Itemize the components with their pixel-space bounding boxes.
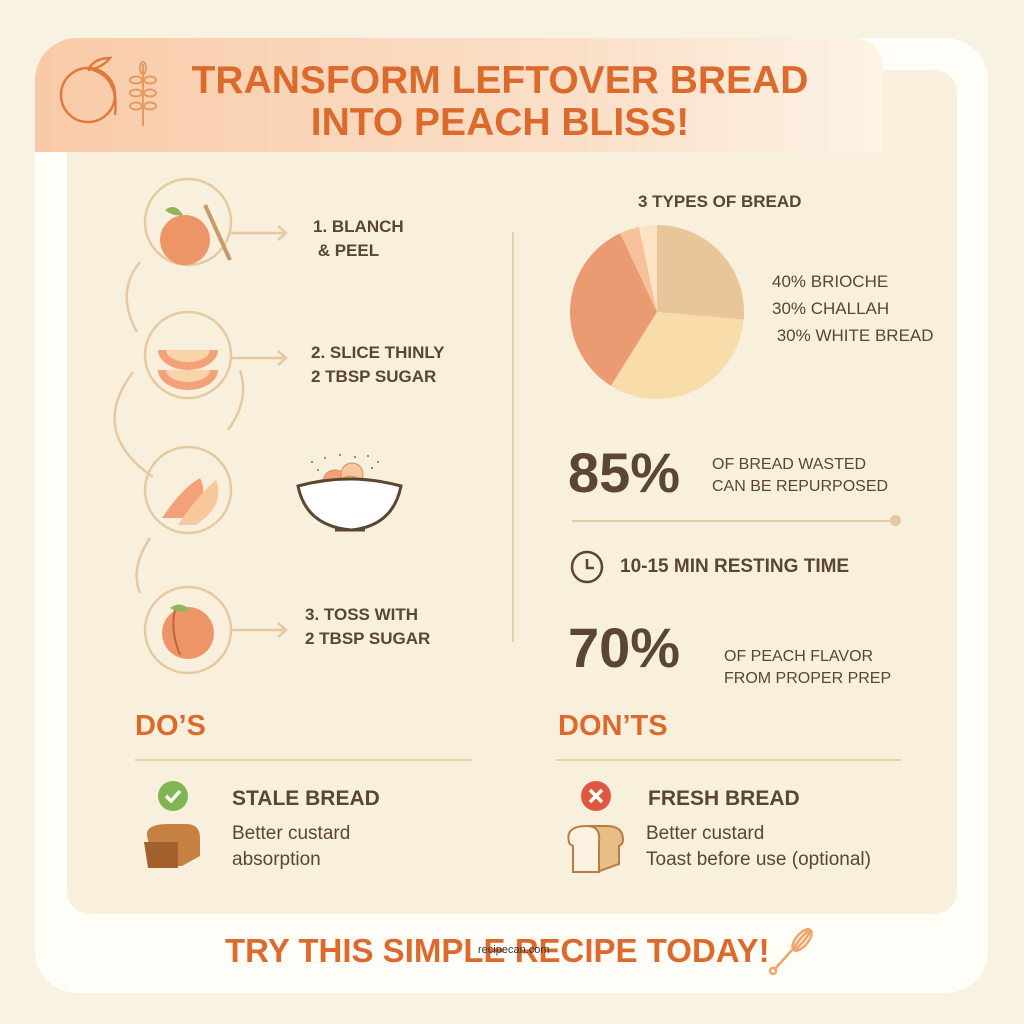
text: 2. SLICE THINLY — [311, 343, 445, 362]
icon: clock + resting time — [570, 550, 849, 584]
header band — [35, 38, 883, 152]
text: FROM PROPER PREP — [724, 670, 891, 687]
text: OF PEACH FLAVOR — [724, 648, 873, 665]
don'ts item — [567, 781, 871, 874]
pie chart: 30% WHITE BREAD — [777, 326, 934, 345]
pie chart: 3 TYPES OF BREAD — [638, 192, 801, 211]
title — [192, 59, 808, 144]
text: 2 TBSP SUGAR — [305, 629, 430, 648]
icon: bowl — [296, 454, 403, 532]
pie chart — [570, 192, 934, 399]
don'ts item: Better custard — [646, 823, 764, 844]
don'ts heading: DON’TS — [558, 710, 668, 742]
don'ts item: Toast before use (optional) — [646, 849, 871, 870]
step texts: & PEEL — [318, 241, 379, 260]
icon: whisk — [768, 928, 813, 976]
icon: peach outline and wheat — [60, 56, 157, 126]
footer call to action: TRY THIS SIMPLE RECIPE TODAY! — [225, 932, 770, 969]
do's item: Better custard — [232, 823, 350, 844]
text: CAN BE REPURPOSED — [712, 478, 888, 495]
step texts — [313, 217, 404, 260]
title: TRANSFORM LEFTOVER BREAD — [192, 59, 808, 102]
text: 2 TBSP SUGAR — [311, 367, 436, 386]
do's item — [144, 781, 380, 870]
stat 85%: 85% — [568, 441, 680, 504]
steps flow — [113, 178, 288, 674]
text: OF BREAD WASTED — [712, 456, 866, 473]
divider vertical — [512, 232, 514, 642]
stat 70%: 70% — [568, 616, 680, 679]
don'ts item: FRESH BREAD — [648, 787, 800, 810]
text: 3. TOSS WITH — [305, 605, 418, 624]
watermark: recipecan.com — [478, 944, 550, 956]
do's item: absorption — [232, 849, 321, 870]
pie chart: 40% BRIOCHE — [772, 272, 888, 291]
do's heading: DO’S — [135, 710, 206, 742]
do's item: STALE BREAD — [232, 787, 380, 810]
step texts: 1. BLANCH — [313, 217, 404, 236]
icon: clock + resting time: 10-15 MIN RESTING TIME — [620, 556, 849, 577]
pie chart: 30% CHALLAH — [772, 299, 889, 318]
title: INTO PEACH BLISS! — [311, 101, 689, 144]
inner panel — [67, 152, 957, 914]
